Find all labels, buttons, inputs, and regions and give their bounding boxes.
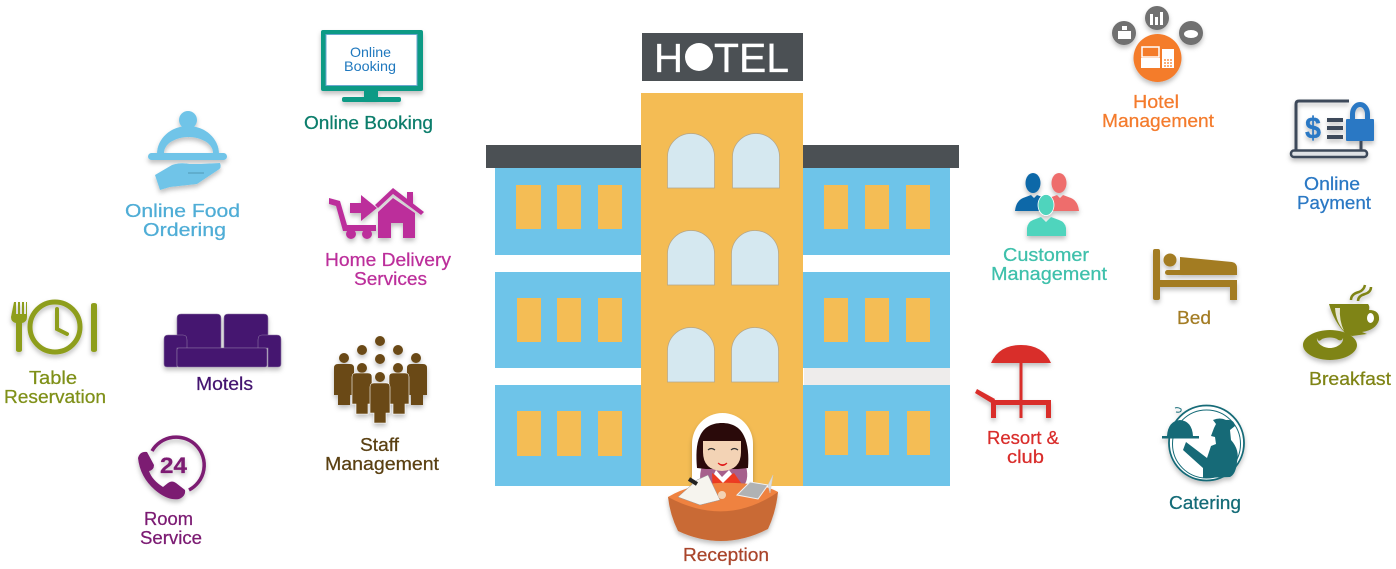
desk	[668, 483, 778, 541]
online booking: Online	[350, 44, 391, 60]
receptionist illustration	[668, 413, 778, 541]
label: Online Booking: Online Booking	[304, 113, 433, 133]
icon: clock with cutlery	[11, 302, 97, 352]
hotel sign: O	[688, 39, 710, 76]
label: Customer Management: Customer	[1003, 245, 1089, 265]
icon: cloche on hand	[148, 111, 227, 190]
online payment: Payment	[1297, 193, 1371, 213]
hotel sign: H	[654, 35, 683, 81]
online food ordering	[125, 111, 240, 240]
label: Home Delivery Services: Home Delivery	[325, 250, 451, 270]
label: Table Reservation: Table	[29, 368, 77, 388]
label: Online Food Ordering: Online Food	[125, 201, 240, 221]
left wing	[486, 145, 642, 486]
table reservation	[4, 302, 106, 407]
resort and club: club	[1007, 447, 1044, 467]
hotel management	[1102, 6, 1214, 131]
hotel sign: TEL	[714, 35, 789, 81]
icon: waiter with cloche	[1162, 406, 1244, 480]
customer management	[991, 173, 1107, 284]
online food ordering: Ordering	[143, 220, 226, 240]
home delivery services: Services	[354, 269, 427, 289]
label: Room Service: Room	[144, 509, 193, 529]
icon: sofa	[164, 314, 281, 367]
label: Reception: Reception	[683, 545, 769, 565]
staff management: Management	[325, 454, 439, 474]
online booking: Booking	[344, 58, 396, 74]
hotel building	[486, 33, 959, 486]
label: Motels: Motels	[196, 374, 253, 394]
room service: Service	[140, 528, 202, 548]
icon: monitor	[321, 30, 423, 102]
room service	[138, 437, 204, 548]
icon: 24 hour phone: 24	[160, 453, 188, 478]
online booking	[304, 30, 433, 133]
right wing	[803, 145, 959, 486]
home delivery services	[325, 188, 451, 289]
label: Online Payment: Online	[1304, 174, 1360, 194]
central tower	[641, 93, 803, 486]
icon: three people	[1015, 173, 1079, 236]
online payment	[1291, 101, 1374, 213]
customer management: Management	[991, 264, 1107, 284]
icon: laptop with lock: $	[1305, 110, 1321, 145]
motels	[164, 314, 281, 394]
label: Staff Management: Staff	[360, 435, 400, 455]
icon: bed	[1153, 249, 1237, 300]
icon: group of staff	[334, 336, 427, 423]
bed	[1153, 249, 1237, 328]
hotel management: Management	[1102, 111, 1214, 131]
staff management	[325, 336, 439, 474]
resort and club	[975, 345, 1059, 467]
table reservation: Reservation	[4, 387, 106, 407]
label: Catering: Catering	[1169, 493, 1241, 513]
icon: parasol and lounger	[975, 345, 1051, 418]
catering	[1162, 406, 1244, 513]
icon: coffee cup and donut	[1303, 285, 1379, 360]
icon: cart and house	[329, 188, 424, 239]
label: Bed: Bed	[1177, 308, 1211, 328]
label: Hotel Management: Hotel	[1133, 92, 1179, 112]
label: Breakfast: Breakfast	[1309, 369, 1391, 389]
icon: cash register with gray satellites	[1112, 6, 1203, 82]
reception	[668, 413, 778, 565]
label: Resort & club: Resort &	[987, 428, 1059, 448]
breakfast	[1303, 285, 1391, 389]
hotel sign	[642, 33, 803, 81]
